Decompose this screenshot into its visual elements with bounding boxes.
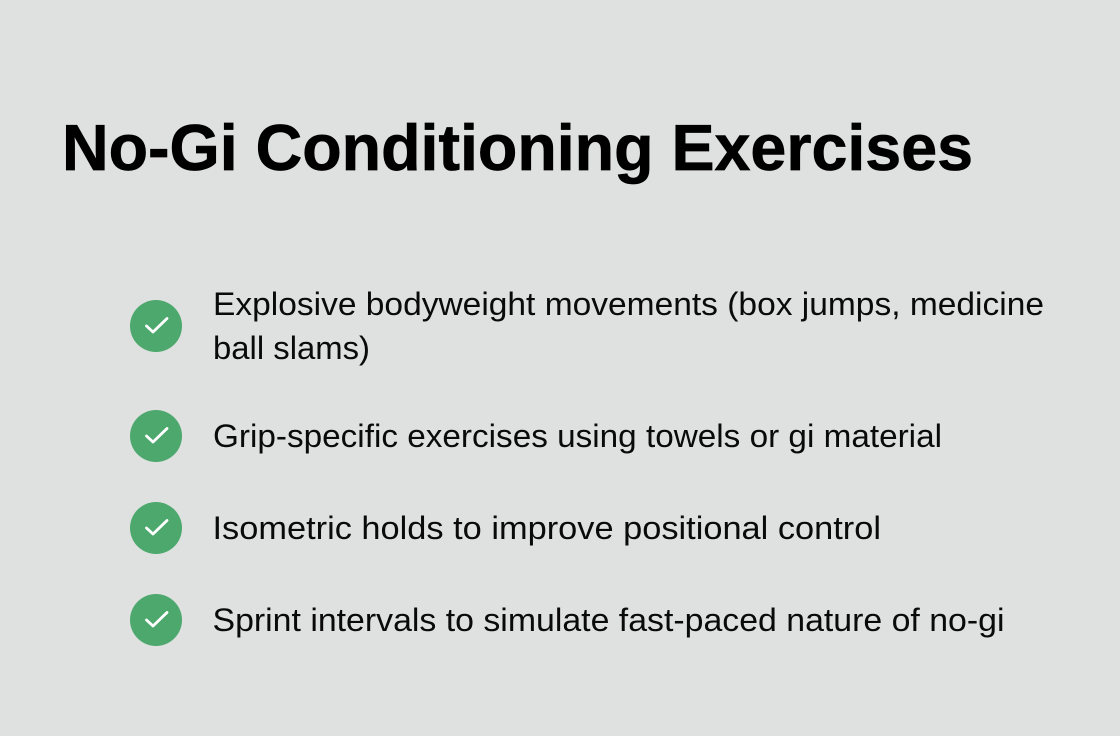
text: item 1: ball slams): [213, 330, 370, 366]
icon: check 4: [130, 594, 182, 646]
icon: check 3: [130, 502, 182, 554]
list item 1: [130, 286, 1044, 366]
list item 4: [130, 594, 1004, 646]
list item 2: [130, 410, 942, 462]
list item 3: [130, 502, 881, 554]
text: item 3: Isometric holds to improve positional control: [212, 510, 881, 546]
text: item 4: Sprint intervals to simulate fast-paced nature of no-gi: [212, 602, 1004, 638]
text: item 2: Grip-specific exercises using towels or gi material: [213, 418, 942, 454]
icon: check 1: [130, 300, 182, 352]
icon: check 2: [130, 410, 182, 462]
text: item 1: Explosive bodyweight movements (box jumps, medicine: [213, 286, 1044, 322]
title: No-Gi Conditioning Exercises: [62, 111, 973, 184]
text: item 1: [213, 286, 1044, 366]
